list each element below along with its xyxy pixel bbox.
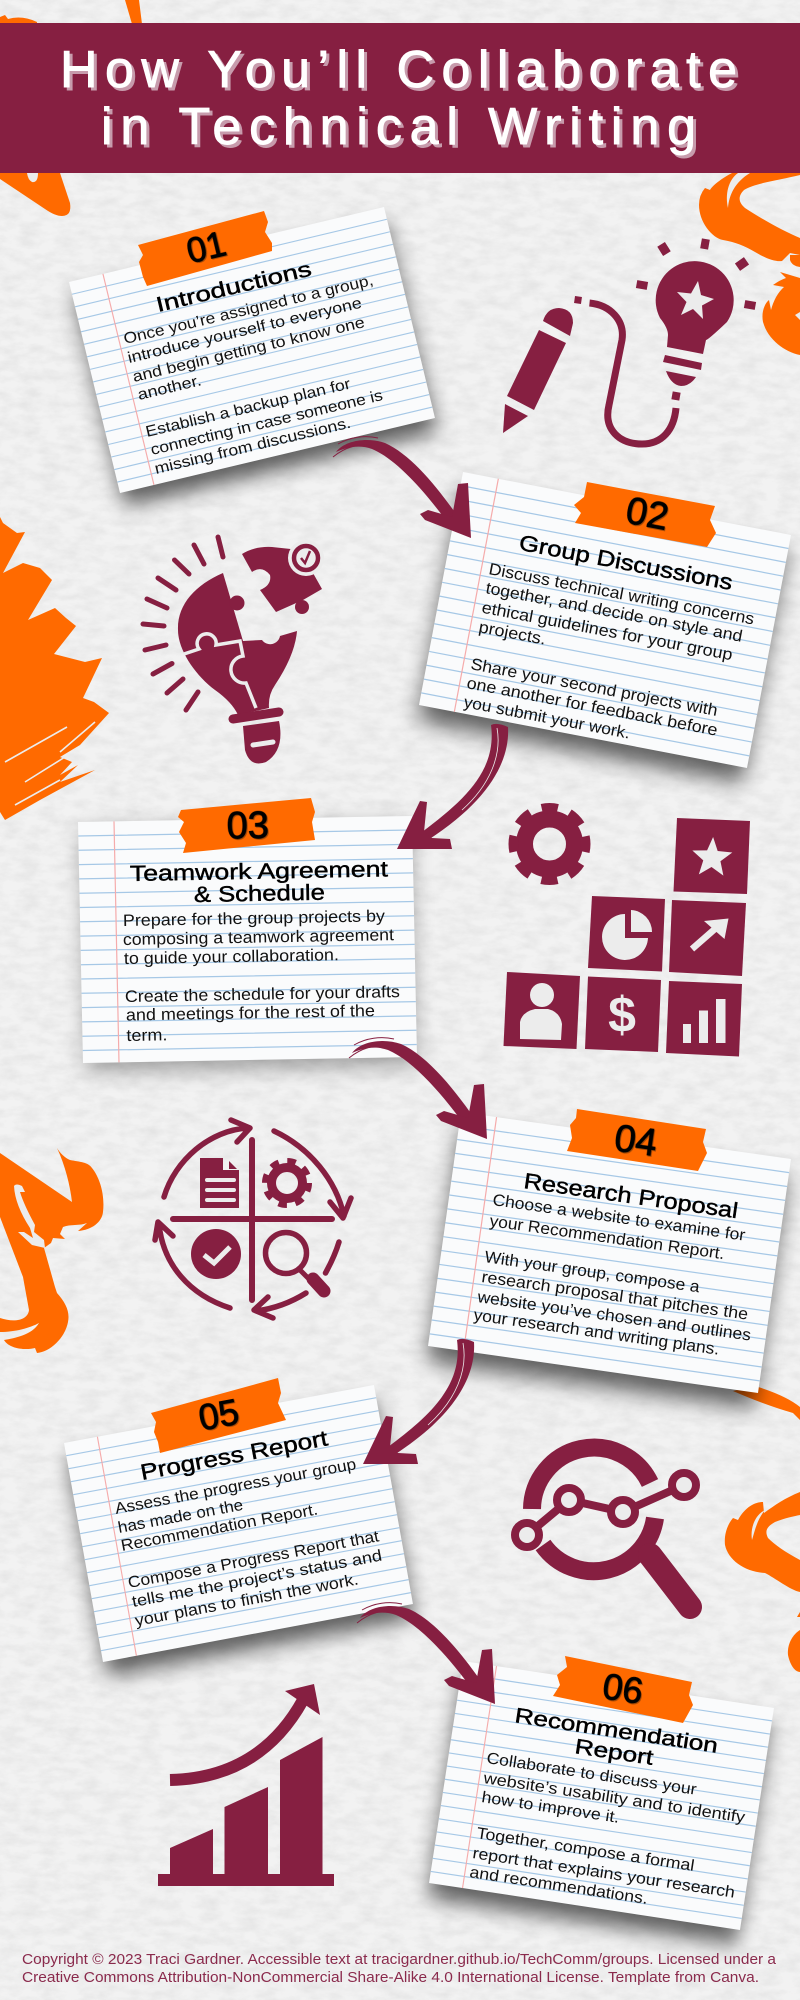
body 02: Share your second projects with [469,655,719,720]
footer credit text [22,1952,777,1986]
body 05: Assess the progress your group [114,1456,358,1518]
body 06: website’s usability and to identify [481,1770,746,1827]
body 04: Choose a website to examine for [491,1191,747,1245]
body 03: and meetings for the rest of the [126,1002,375,1024]
body 05: your plans to finish the work. [134,1571,360,1630]
tape 02 [574,482,716,547]
note paper 06 [427,1661,774,1945]
icon: cycle with four quadrants [155,1120,351,1318]
body 04: your research and writing plans. [472,1306,720,1359]
body 02: one another for feedback before [465,674,719,740]
tape 04 [567,1109,707,1171]
body 01: another. [136,372,203,404]
number 01: 01 [183,224,230,271]
panel: step 02 Group Discussions [416,472,791,783]
body 03: composing a teamwork agreement [123,926,395,949]
heading 03: & Schedule [194,880,325,907]
tape 05 [151,1378,286,1453]
body 03: to guide your collaboration. [124,946,339,968]
note paper 02 [416,472,791,783]
arrow: step 01 to 02 [333,437,471,538]
panel: step 06 Recommendation Report [427,1656,774,1945]
footer credit text: Creative Commons Attribution-NonCommercial Share-Alike 4.0 International License. Template from Canva. [22,1970,759,1986]
body 01: connecting in case someone is [149,387,385,459]
body 04: website you’ve chosen and outlines [475,1288,752,1345]
note paper 04 [426,1112,791,1409]
body 06: and recommendations. [468,1864,649,1908]
heading 06: Recommendation [513,1704,719,1758]
icon: puzzle light bulb [143,537,324,764]
heading 02: Group Discussions [517,530,735,595]
icon: gear and tile blocks [504,808,750,1056]
heading 06 [513,1704,719,1770]
note paper 03 [78,816,417,1071]
body 03: Prepare for the group projects by [123,907,386,930]
body 01 [122,272,385,478]
body 02 [462,560,756,743]
body 06: how to improve it. [480,1789,620,1827]
heading 03 [130,856,388,907]
number 06: 06 [600,1665,646,1712]
arrow: step 02 to 03 [397,724,508,849]
body 01: introduce yourself to everyone [126,295,363,367]
body 06: report that explains your research [471,1845,736,1902]
heading 01: Introductions [154,258,314,317]
heading 04: Research Proposal [522,1168,740,1223]
body 05: Recommendation Report. [120,1501,319,1555]
title line 2: in Technical Writing [101,98,696,156]
note paper 05 [64,1385,416,1677]
panel: step 04 Research Proposal [426,1109,791,1409]
body 05: Compose a Progress Report that [127,1528,381,1592]
body 04: your Recommendation Report. [488,1212,726,1263]
panel: step 01 Introductions [69,207,438,507]
icon: rising bar chart with arrow [158,1684,334,1886]
arrow: step 04 to 05 [363,1339,474,1464]
icon: gear and tile blocks: $ [608,987,636,1043]
body 01: Establish a backup plan for [144,376,352,441]
tape 03 [178,798,315,853]
body 04 [472,1191,752,1359]
body 01: Once you’re assigned to a group, [122,272,375,348]
heading 03: Teamwork Agreement [130,856,388,886]
body 05: tells me the project’s status and [131,1547,383,1611]
panel: step 05 Progress Report [64,1378,416,1677]
title line 1: How You’ll Collaborate [60,41,737,99]
body 05 [114,1456,383,1630]
body 05: has made on the [117,1497,245,1537]
body 03 [123,907,400,1045]
body 02: ethical guidelines for your group [480,599,734,664]
number 05: 05 [195,1391,242,1439]
icon: magnifier with line graph [515,1448,696,1607]
tape 06 [553,1656,693,1723]
body 06: Together, compose a formal [475,1825,696,1875]
body 06: Collaborate to discuss your [485,1750,698,1799]
note paper 01 [69,207,438,507]
panel: step 03 Teamwork Agreement and Schedule [78,798,417,1071]
number 03: 03 [226,805,269,847]
heading 06: Report [573,1735,655,1770]
footer credit text: Copyright © 2023 Traci Gardner. Accessible text at tracigardner.github.io/TechComm/groups. Licensed under a [22,1952,777,1968]
body 02: you submit your work. [462,693,632,743]
body 02: Discuss technical writing concerns [487,560,756,628]
body 03: Create the schedule for your drafts [125,983,400,1006]
number 04: 04 [612,1117,660,1165]
arrow: step 03 to 04 [349,1038,487,1139]
body 06 [468,1750,746,1908]
body 01: and begin getting to know one [131,314,367,386]
number 02: 02 [623,490,672,539]
body 01: missing from discussions. [153,415,353,478]
body 04: With your group, compose a [483,1248,702,1296]
tape 01 [138,211,272,286]
body 04: research proposal that pitches the [480,1268,749,1324]
body 02: projects. [477,618,547,649]
body 03: term. [126,1026,168,1045]
heading 05: Progress Report [138,1425,330,1485]
icon: pencil and light bulb [503,238,756,444]
arrow: step 05 to 06 [357,1603,495,1704]
body 02: together, and decide on style and [484,579,744,646]
title banner [0,23,800,173]
